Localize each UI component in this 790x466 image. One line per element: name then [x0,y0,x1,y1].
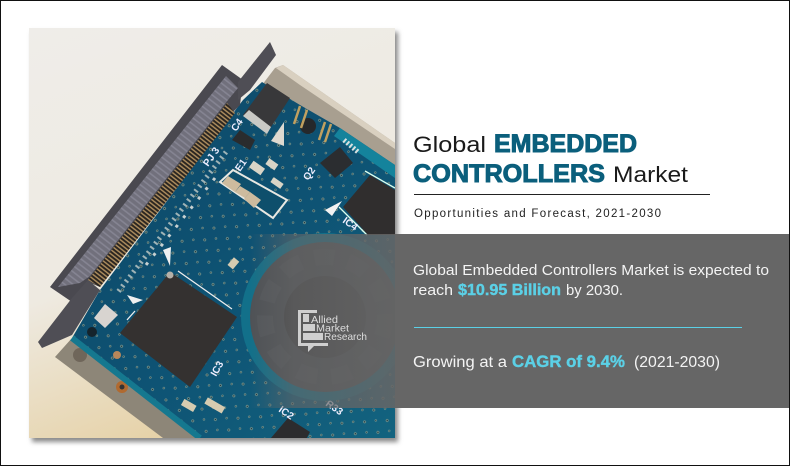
top metal plate [264,65,395,165]
small chip [320,147,353,178]
white marker arrow [325,201,342,216]
photo: circuit board [29,28,409,445]
title: Market [613,162,688,187]
connector housing [50,65,243,302]
blue board [72,82,395,438]
market size text: by 2030. [566,282,623,299]
subtitle: Opportunities and Forecast, 2021-2030 [414,208,661,220]
board silkscreen labels: IC4 [340,215,360,234]
grey stat panel [395,234,789,408]
market size text: reach [413,282,453,299]
main chip [120,272,237,387]
logo: Allied Market Research [298,310,367,352]
pad block E1 [220,158,287,218]
CAGR text: CAGR of 9.4% [512,353,625,371]
board silkscreen labels: IC3 [209,359,227,378]
title: Global [413,132,486,157]
lower metal plate [55,338,200,438]
market size text: $10.95 Billion [458,282,561,299]
board silkscreen labels: R33 [323,398,345,418]
chip IC4 [343,175,395,235]
chip markers [163,247,171,266]
connector pins [88,103,235,287]
board silkscreen labels: Q2 [301,165,318,183]
market size text: Global Embedded Controllers Market is expected to [413,262,769,279]
logo: Allied Market Research: Market [316,322,349,334]
logo: Allied Market Research: Allied [311,314,338,326]
CAGR text [413,353,720,371]
board silkscreen labels: E1 [233,157,250,174]
CAGR text: Growing at a [413,354,507,371]
market size text [413,262,769,299]
transistor [300,118,316,134]
row of small pads beside pins [118,152,226,292]
board silkscreen labels: C4 [229,117,246,134]
chip IC2 [271,418,310,438]
connector bottom tail [38,280,100,348]
board silkscreen labels [201,117,360,423]
board silkscreen labels: PJ 3 [201,145,223,169]
board silkscreen labels: IC2 [276,404,296,423]
title [413,130,688,188]
white component [94,304,118,328]
connector top tip [238,42,276,100]
white triangle marker [271,122,284,146]
disc [241,233,409,401]
title: EMBEDDED [494,130,637,158]
CAGR text: (2021-2030) [634,354,720,371]
black diode [243,83,290,128]
title: CONTROLLERS [413,160,605,188]
logo: Allied Market Research: Research [324,331,367,343]
photo shadow [32,32,398,442]
photo overlay fade [250,234,395,408]
